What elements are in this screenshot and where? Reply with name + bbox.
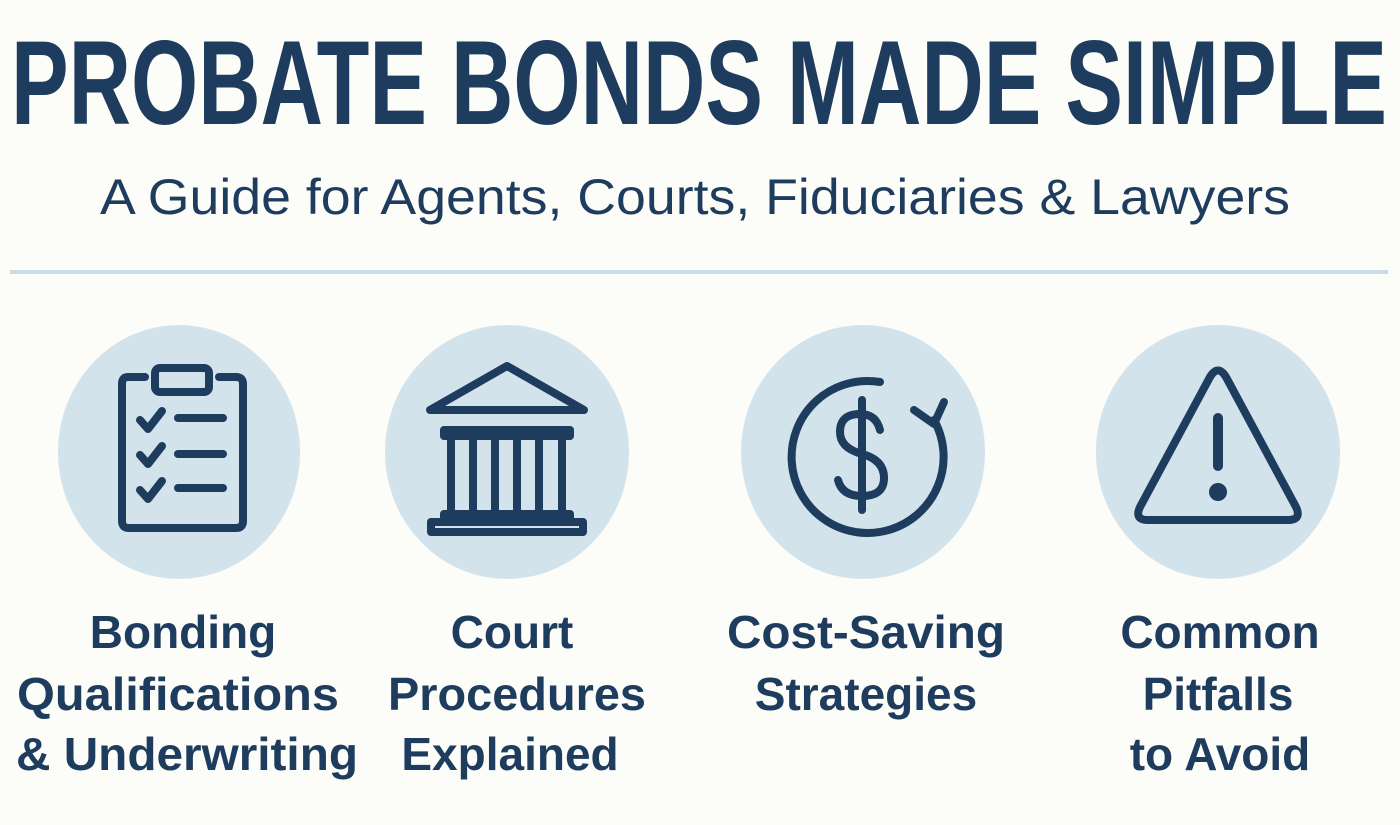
panel: pitfalls	[1096, 325, 1340, 780]
icon: courthouse	[385, 325, 629, 579]
label: pitfalls: Common	[1120, 606, 1320, 658]
icon: dollar cycle	[741, 325, 985, 579]
panel: cost-saving	[727, 325, 1005, 720]
label: cost-saving: Strategies	[755, 668, 977, 720]
label: pitfalls: Pitfalls	[1143, 668, 1293, 720]
label: bonding: Bonding	[90, 606, 276, 658]
label: bonding: & Underwriting	[16, 728, 358, 780]
label: court: Explained	[401, 728, 619, 780]
label: bonding: Qualifications	[17, 668, 339, 720]
label: cost-saving: Cost-Saving	[727, 606, 1005, 658]
label: court: Procedures	[388, 668, 646, 720]
panel: bonding qualifications	[16, 325, 358, 780]
panel: court procedures	[385, 325, 646, 780]
icon: warning	[1096, 325, 1340, 579]
subtitle: A Guide for Agents, Courts, Fiduciaries & Lawyers	[100, 169, 1290, 225]
label: pitfalls: to Avoid	[1130, 728, 1310, 780]
icon: clipboard	[58, 325, 300, 579]
label: court: Court	[451, 606, 573, 658]
